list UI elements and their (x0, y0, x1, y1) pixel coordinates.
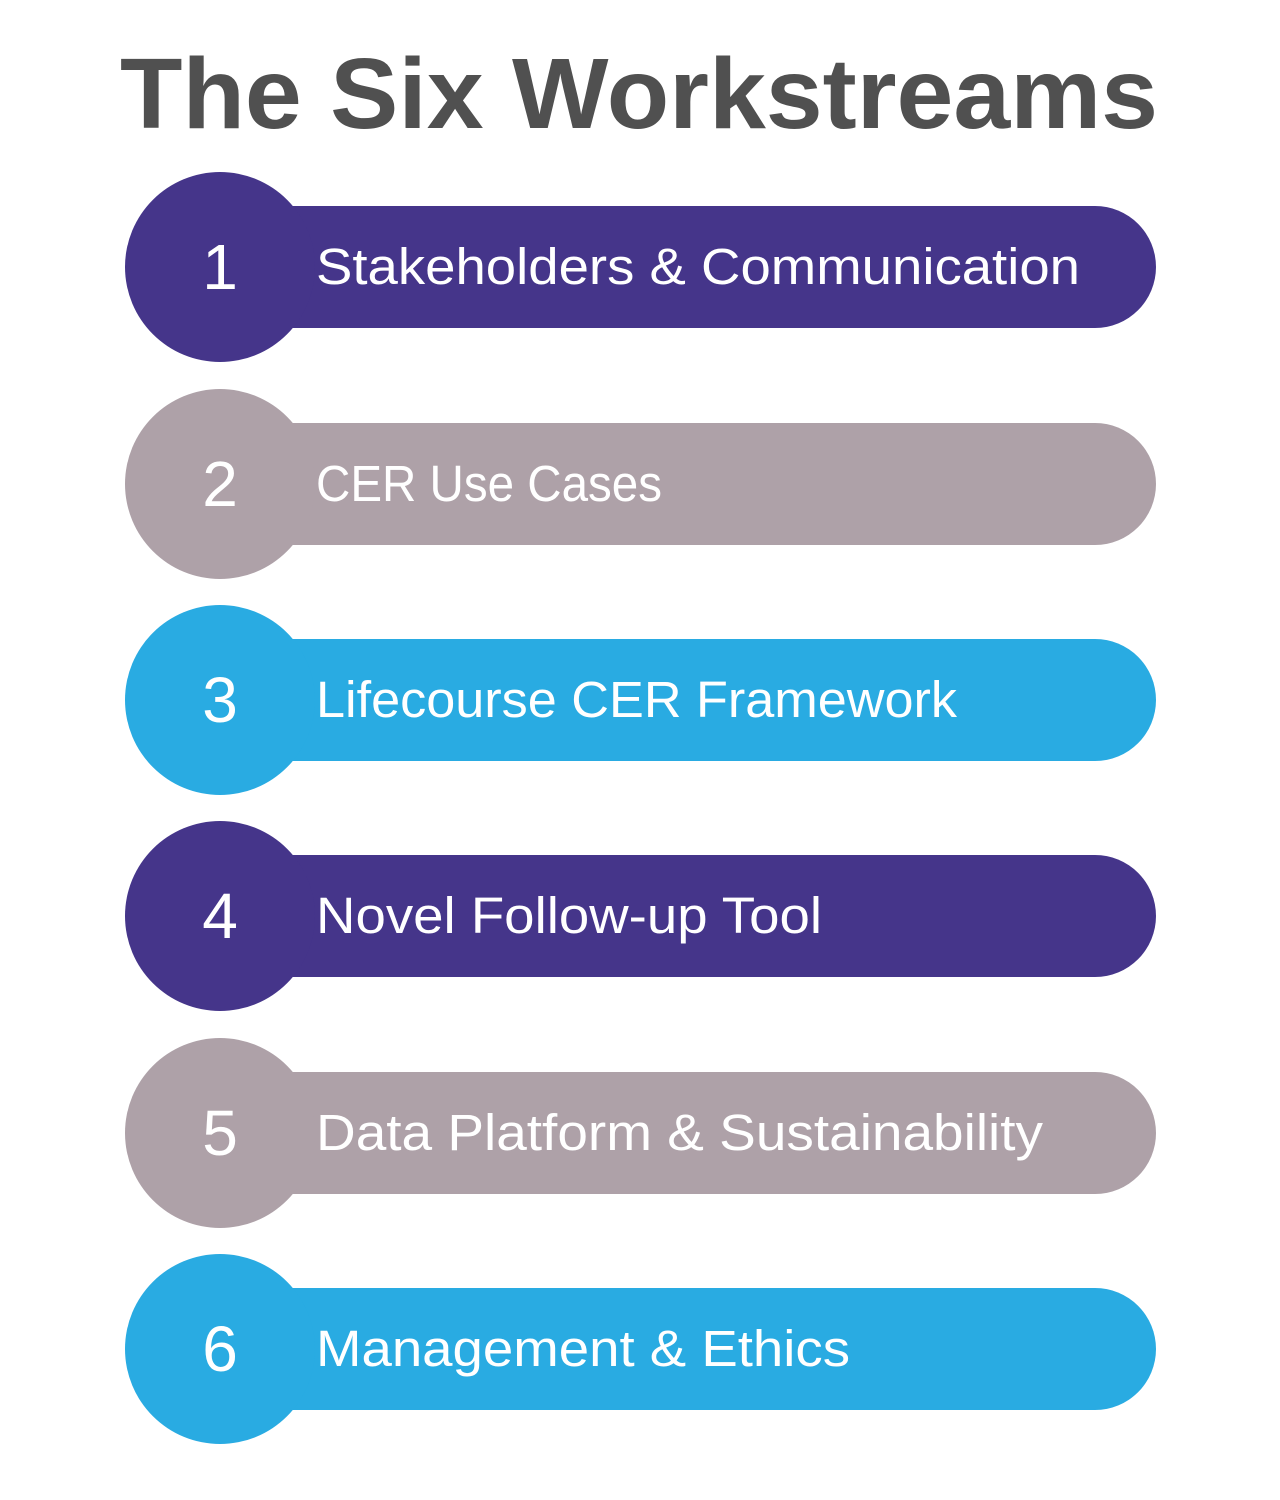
row 5: Data Platform & Sustainability (125, 1038, 1156, 1228)
row 4: Novel Follow-up Tool (125, 821, 1156, 1011)
row 6: Management & Ethics: Management & Ethics (316, 1320, 850, 1377)
row 2: CER Use Cases: 2 (202, 448, 238, 520)
row 5: Data Platform & Sustainability: 5 (202, 1097, 238, 1169)
row 1: Stakeholders & Communication (125, 172, 1156, 362)
row 3: Lifecourse CER Framework: 3 (202, 664, 238, 736)
row 5: Data Platform & Sustainability: Data Platform & Sustainability (316, 1104, 1044, 1161)
row 6: Management & Ethics: 6 (202, 1313, 238, 1385)
row 2: CER Use Cases (125, 389, 1156, 579)
title: The Six Workstreams (120, 38, 1158, 150)
row 1: Stakeholders & Communication: Stakeholders & Communication (316, 238, 1080, 295)
row 4: Novel Follow-up Tool: 4 (202, 880, 238, 952)
row 4: Novel Follow-up Tool: Novel Follow-up Tool (316, 887, 822, 944)
row 1: Stakeholders & Communication: 1 (202, 231, 238, 303)
row 2: CER Use Cases: CER Use Cases (316, 455, 662, 512)
row 3: Lifecourse CER Framework: Lifecourse CER Framework (316, 671, 958, 728)
row 6: Management & Ethics (125, 1254, 1156, 1444)
row 3: Lifecourse CER Framework (125, 605, 1156, 795)
